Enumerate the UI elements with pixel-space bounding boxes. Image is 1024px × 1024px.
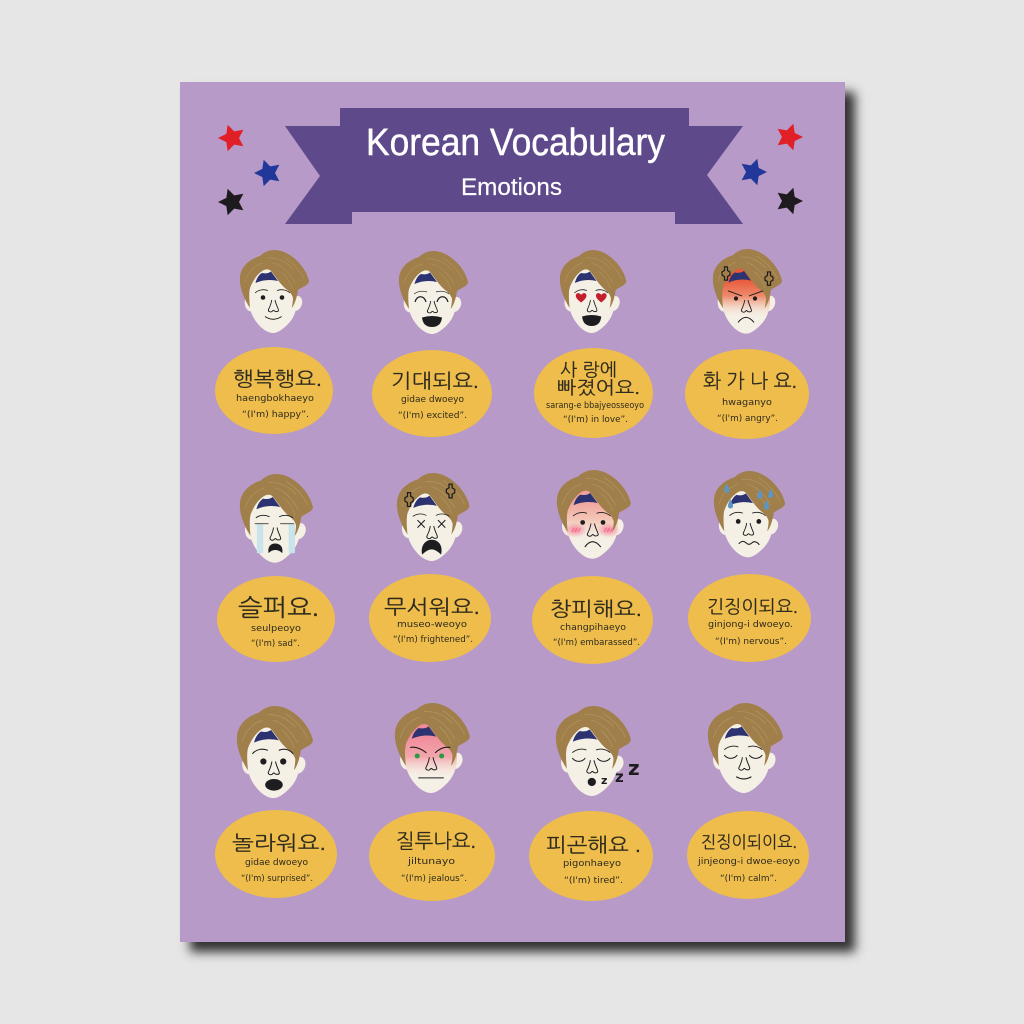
romanization: sad: seulpeoyo [251, 624, 301, 634]
face: in love [560, 250, 626, 333]
romanization: nervous: ginjong-i dwoeyo. [708, 620, 793, 630]
romanization: jealous: jiltunayo [407, 857, 455, 867]
speech oval: happy [215, 347, 333, 434]
translation: frightened: “(I'm) frightened”. [393, 635, 473, 645]
speech oval: surprised [215, 810, 337, 898]
romanization: frightened: museo-weoyo [397, 620, 467, 630]
Korean word: happy: 행복행요. [233, 369, 322, 391]
face: jealous [395, 703, 470, 793]
romanization: surprised: gidae dwoeyo [245, 858, 308, 868]
Korean word line 2: in love: 빠졌어요. [557, 378, 640, 398]
speech oval: nervous [688, 574, 811, 662]
speech oval: frightened [369, 574, 491, 662]
translation: embarrassed: “(I'm) embarassed”. [553, 638, 640, 648]
sleeping z letters [601, 756, 640, 787]
Korean word: sad: 슬퍼요. [238, 595, 319, 622]
card: calm [687, 703, 809, 899]
romanization: embarrassed: changpihaeyo [560, 623, 626, 633]
Korean word: jealous: 질투나요. [396, 831, 476, 853]
Korean word: nervous: 긴징이되요. [707, 597, 798, 617]
face: nervous [714, 471, 785, 557]
speech oval: in love [534, 348, 653, 438]
stars right [742, 124, 803, 214]
Korean word: frightened: 무서워요. [384, 597, 480, 619]
translation: jealous: “(I'm) jealous”. [401, 874, 467, 884]
card: embarrassed [532, 470, 653, 664]
card: frightened [369, 473, 491, 662]
Korean word line 1: in love: 사 랑에 [560, 360, 617, 380]
banner ribbon [285, 108, 743, 224]
romanization: calm: jinjeong-i dwoe-eoyo [697, 857, 800, 867]
stars left [218, 125, 279, 215]
Korean word: calm: 진징이되이요. [701, 833, 797, 852]
translation: surprised: “(I'm) surprised”. [241, 874, 313, 884]
Korean word: excited: 기대되요. [391, 371, 479, 393]
Korean word: embarrassed: 창피해요. [550, 599, 642, 621]
translation: angry: “(I'm) angry”. [717, 414, 778, 424]
romanization: angry: hwaganyo [722, 398, 772, 408]
speech oval: tired [529, 811, 653, 901]
poster background [180, 82, 845, 942]
face: happy [240, 250, 309, 333]
card: nervous [688, 471, 811, 662]
face: surprised [237, 706, 313, 798]
card: surprised [215, 706, 337, 898]
speech oval: angry [685, 349, 809, 439]
subtitle: Emotions [461, 174, 562, 201]
speech oval: jealous [369, 811, 495, 901]
romanization: in love: sarang-e bbajyeosseoyo [546, 401, 644, 411]
card: angry [685, 249, 809, 439]
sleeping z letters: z [601, 774, 607, 787]
face: frightened [397, 473, 469, 561]
Korean word: tired: 피곤해요 . [546, 835, 641, 857]
translation: sad: “(I'm) sad”. [251, 639, 300, 649]
speech oval: embarrassed [532, 576, 653, 664]
translation: tired: “(I'm) tired”. [564, 876, 623, 886]
romanization: tired: pigonhaeyo [563, 859, 621, 869]
card: jealous [369, 703, 495, 901]
translation: happy: “(I'm) happy”. [242, 410, 309, 420]
card: in love [534, 250, 653, 438]
face: calm [708, 703, 783, 793]
face: sad [240, 474, 313, 563]
card: tired [529, 706, 653, 901]
card: happy [215, 250, 333, 434]
speech oval: sad [217, 576, 335, 662]
romanization: excited: gidae dwoeyo [401, 395, 464, 405]
Korean word: surprised: 놀라워요. [232, 833, 326, 855]
translation: excited: “(I'm) excited”. [398, 411, 467, 421]
face: angry [713, 249, 782, 334]
speech oval: calm [687, 811, 809, 899]
translation: nervous: “(I'm) nervous”. [715, 637, 787, 647]
translation: calm: “(I'm) calm”. [720, 874, 777, 884]
card: excited [372, 251, 492, 437]
sleeping z letters: z [615, 768, 624, 786]
card: sad [217, 474, 335, 662]
face: tired [556, 706, 631, 796]
face: embarrassed [557, 470, 631, 559]
sleeping z letters: z [628, 756, 640, 780]
romanization: happy: haengbokhaeyo [236, 394, 314, 404]
face: excited [399, 251, 468, 334]
speech oval: excited [372, 350, 492, 437]
Korean word: angry: 화 가 나 요. [703, 371, 797, 393]
title: Korean Vocabulary [366, 122, 665, 164]
translation: in love: “(I'm) in love”. [563, 415, 628, 425]
